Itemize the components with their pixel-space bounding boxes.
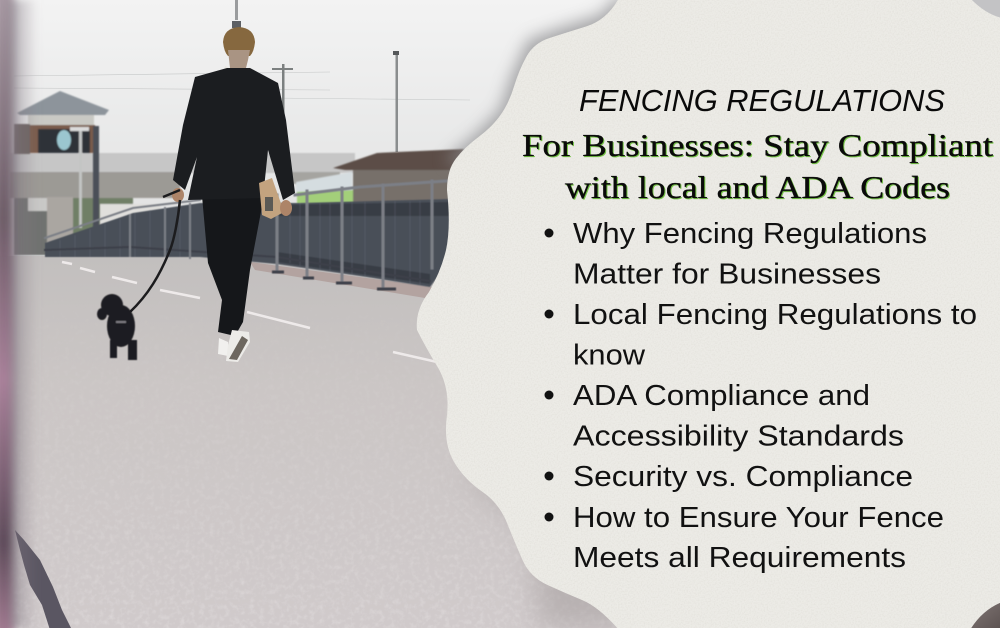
road shade near panel xyxy=(476,488,617,628)
top right corner xyxy=(960,0,1000,24)
bullet list xyxy=(544,218,977,574)
leash xyxy=(130,190,180,312)
item 3 xyxy=(544,380,904,452)
background photo: man walking dog on a bridge road xyxy=(0,0,640,628)
paper grain xyxy=(410,0,1000,628)
man walking xyxy=(172,27,295,362)
item 3: Accessibility Standards xyxy=(573,420,904,452)
left blurred strip xyxy=(0,0,14,628)
item 2: Local Fencing Regulations to xyxy=(573,299,977,331)
bottom right corner xyxy=(960,596,1000,628)
hand left xyxy=(172,188,184,202)
item 1 xyxy=(544,218,927,290)
face and neck xyxy=(228,50,250,68)
item 5 xyxy=(544,502,944,574)
item 3: ADA Compliance and xyxy=(573,380,870,412)
curb stripe xyxy=(15,530,72,628)
hair xyxy=(223,27,255,56)
item 2 xyxy=(544,299,977,372)
subtitle line 1: For Businesses: Stay Compliant xyxy=(522,127,993,163)
overhead wires xyxy=(14,72,470,100)
item 5: Meets all Requirements xyxy=(573,542,906,574)
sidewalk strip xyxy=(250,262,440,298)
lane markings xyxy=(62,262,437,362)
utility pole xyxy=(272,64,293,113)
street lamp xyxy=(393,51,399,152)
shoe sole xyxy=(229,336,248,360)
title line: fencing regulations: FENCING REGULATIONS xyxy=(579,83,945,118)
overpass bridge xyxy=(10,153,355,255)
black dog xyxy=(97,294,137,360)
road xyxy=(0,256,640,628)
item 1: Matter for Businesses xyxy=(573,258,881,290)
black jacket xyxy=(173,68,295,200)
panel fill xyxy=(410,0,1000,628)
wavy paper panel xyxy=(410,0,1000,628)
grey railing fence xyxy=(45,181,450,289)
white shoe far xyxy=(218,338,228,356)
road texture xyxy=(20,536,523,628)
collar xyxy=(224,66,250,68)
shadow behind wavy panel xyxy=(445,0,630,168)
left building xyxy=(14,91,109,228)
subtitle line 2: with local and ADA Codes xyxy=(565,169,950,205)
wooden shed xyxy=(296,149,464,204)
hand right xyxy=(280,200,292,216)
distant tower xyxy=(232,0,241,28)
title xyxy=(522,83,993,205)
item 1: Why Fencing Regulations xyxy=(573,218,927,250)
sky xyxy=(20,0,610,40)
white shoe near xyxy=(226,330,250,362)
skateboard xyxy=(259,178,284,219)
trousers xyxy=(202,196,264,336)
item 2: know xyxy=(573,340,646,372)
left soft fade xyxy=(10,0,38,628)
item 5: How to Ensure Your Fence xyxy=(573,502,944,534)
item 4: Security vs. Compliance xyxy=(573,461,913,493)
